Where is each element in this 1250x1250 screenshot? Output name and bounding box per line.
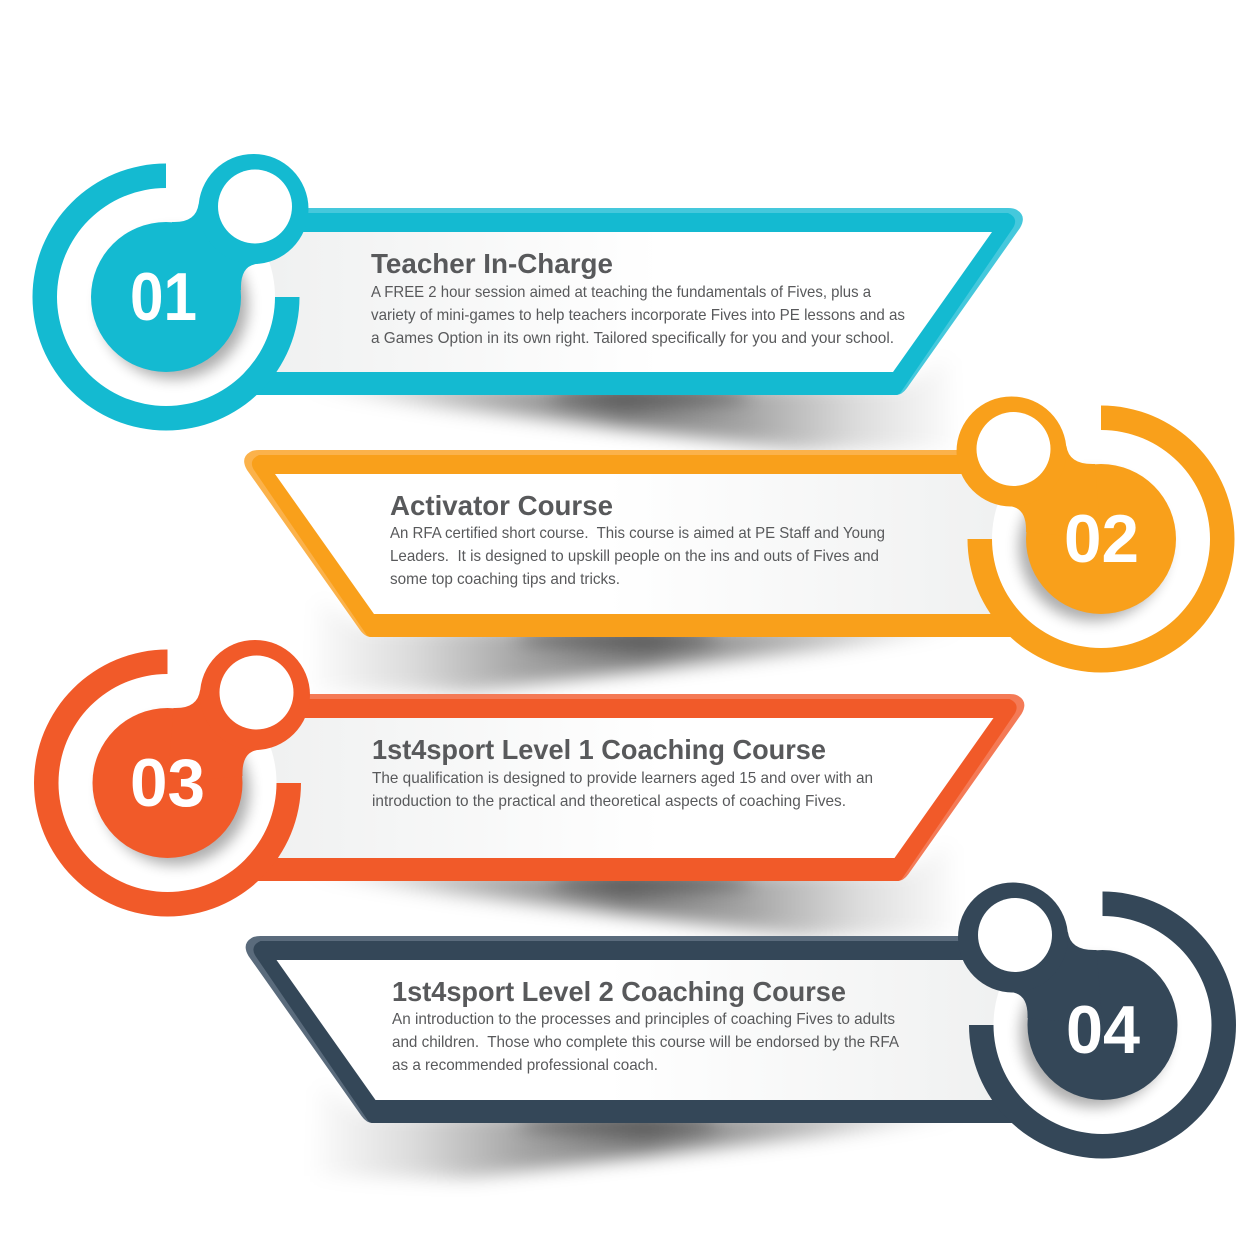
description 03: [372, 770, 873, 810]
description 02: [390, 525, 885, 588]
number 04: 04: [1066, 992, 1140, 1068]
heading: Activator Course: Activator Course: [390, 490, 613, 521]
outer progress arc: [968, 406, 1234, 672]
number disc with neck and small ring: [92, 640, 310, 858]
description 03: The qualification is designed to provide learners aged 15 and over with an: [372, 770, 873, 787]
description 04: An introduction to the processes and principles of coaching Fives to adults: [392, 1011, 895, 1028]
white ring interior: [994, 916, 1212, 1134]
module 02: Activator Course graphic: [244, 396, 1234, 692]
disc shadow: [1019, 473, 1167, 621]
text panel: [275, 474, 1037, 614]
number disc with neck and small ring: [956, 396, 1176, 614]
description 04: and children. Those who complete this course will be endorsed by the RFA: [392, 1034, 899, 1051]
description 01: [371, 284, 905, 347]
text panel: [276, 960, 1038, 1100]
description 02: some top coaching tips and tricks.: [390, 571, 620, 588]
module 01: Teacher In-Charge graphic: [32, 154, 1023, 450]
ribbon frame: [246, 936, 1018, 1123]
description 03: introduction to the practical and theoretical aspects of coaching Fives.: [372, 793, 846, 810]
ribbon shadow: [290, 355, 955, 450]
white ring interior: [58, 674, 276, 892]
ribbon shadow: [312, 597, 977, 692]
number 03: 03: [130, 745, 205, 821]
disc shadow: [1020, 959, 1168, 1107]
number 01: 01: [130, 259, 197, 335]
heading: Teacher In-Charge: Teacher In-Charge: [371, 248, 613, 279]
outer progress arc: [969, 892, 1236, 1158]
white ring interior: [992, 430, 1210, 648]
ribbon frame: [252, 694, 1024, 881]
description 04: as a recommended professional coach.: [392, 1057, 658, 1074]
number disc with neck and small ring: [958, 882, 1178, 1100]
module 03: Level 1 Coaching Course graphic: [34, 640, 1024, 936]
outer progress arc: [34, 650, 301, 916]
disc shadow: [102, 717, 250, 865]
ribbon frame: [244, 450, 1017, 637]
ribbon shadow: [314, 1083, 978, 1178]
heading: 1st4sport Level 1 Coaching Course: 1st4sport Level 1 Coaching Course: [372, 734, 826, 765]
description 02: Leaders. It is designed to upskill people on the ins and outs of Fives and: [390, 548, 879, 565]
disc shadow: [100, 231, 248, 379]
description 04: [392, 1011, 899, 1074]
number disc with neck and small ring: [91, 154, 308, 372]
description 01: a Games Option in its own right. Tailored specifically for you and your school.: [371, 330, 894, 347]
white ring interior: [57, 188, 275, 406]
text panel: [230, 232, 992, 372]
description 02: An RFA certified short course. This course is aimed at PE Staff and Young: [390, 525, 885, 542]
module 04: Level 2 Coaching Course graphic: [246, 882, 1236, 1178]
description 01: variety of mini-games to help teachers incorporate Fives into PE lessons and as: [371, 307, 905, 324]
text panel: [232, 718, 994, 858]
description 01: A FREE 2 hour session aimed at teaching the fundamentals of Fives, plus a: [371, 284, 871, 301]
outer progress arc: [32, 164, 299, 430]
ribbon shadow: [292, 841, 956, 936]
ribbon frame: [250, 208, 1023, 395]
number 02: 02: [1064, 501, 1139, 577]
heading: 1st4sport Level 2 Coaching Course: 1st4sport Level 2 Coaching Course: [392, 976, 846, 1007]
